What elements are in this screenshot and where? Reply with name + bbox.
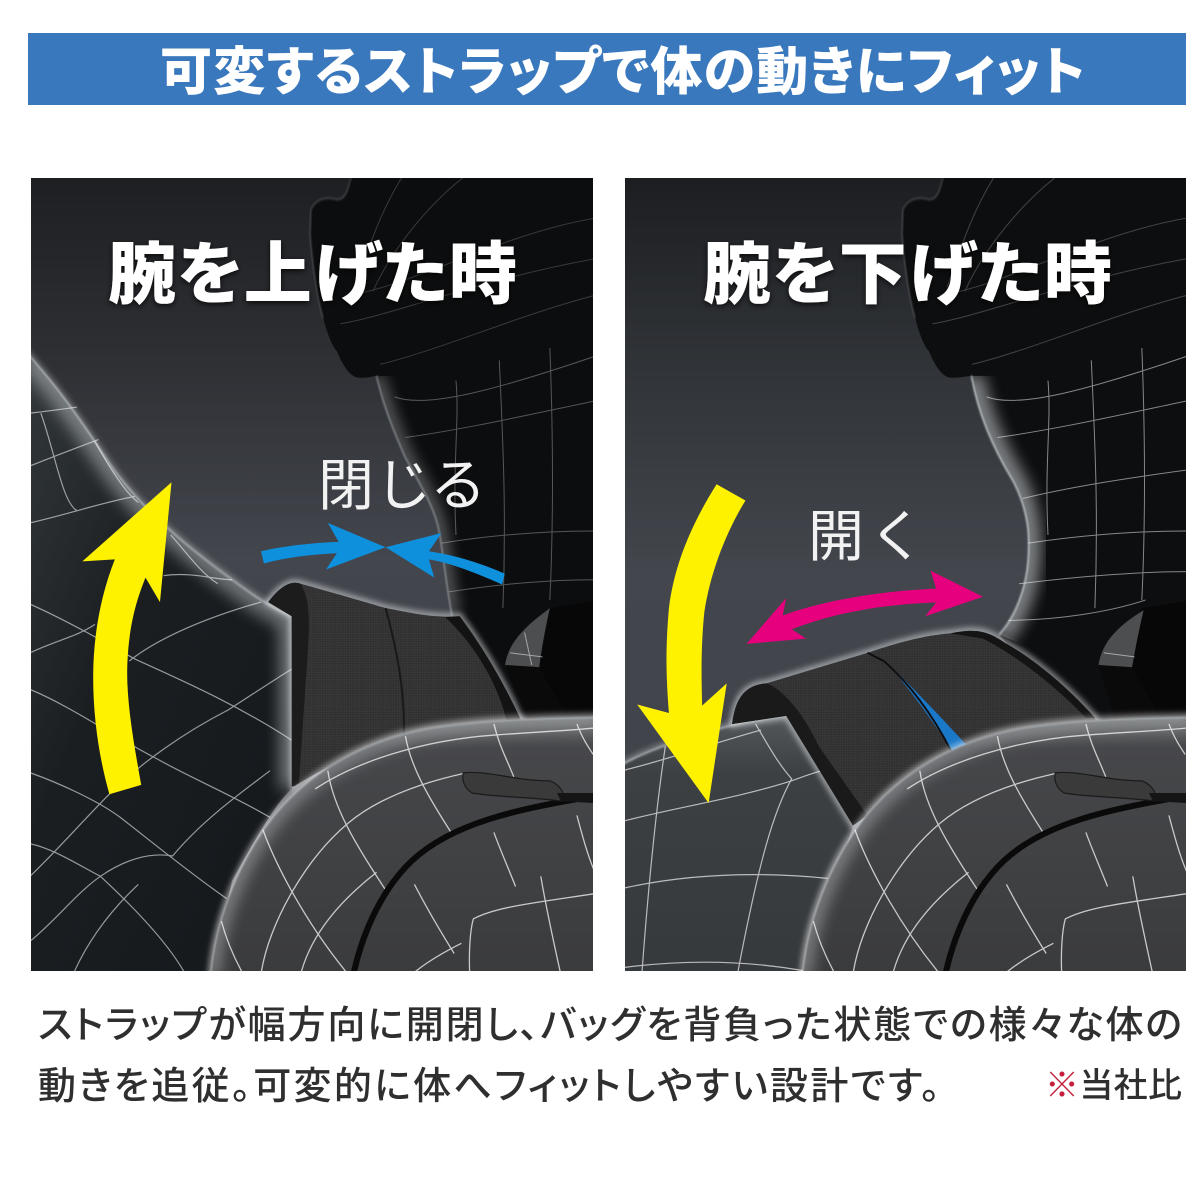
small rear strap <box>1098 610 1144 668</box>
arrow: yellow upward <box>82 482 172 794</box>
arrow: blue closing right <box>386 533 505 585</box>
panel: arm raised <box>28 173 600 978</box>
description text: 動きを追従。可変的に体へフィットしやすい設計です。 <box>38 1066 940 1108</box>
bag body <box>802 717 1192 978</box>
title text: 可変するストラップで体の動きにフィット <box>160 44 1085 102</box>
title banner <box>28 33 1186 105</box>
label: closing: 閉じる <box>318 454 483 517</box>
strap open with blue gap <box>732 631 1099 826</box>
small rear strap <box>505 608 550 668</box>
raised arm with grid <box>28 356 292 978</box>
lowered arm with grid <box>620 716 853 978</box>
arrow: yellow downward <box>637 484 745 803</box>
neck and head silhouette <box>902 173 1192 746</box>
arrow: blue closing left <box>261 523 386 570</box>
description text: ストラップが幅方向に開閉し、バッグを背負った状態での様々な体の <box>38 1005 1182 1047</box>
strap closed <box>268 583 521 787</box>
bag body <box>210 717 600 978</box>
heading: arm raised: 腕を上げた時 <box>108 237 517 313</box>
footnote: company comparison: ※当社比 <box>1045 1067 1182 1105</box>
heading: arm lowered: 腕を下げた時 <box>703 237 1112 313</box>
arrow: magenta double <box>747 571 983 644</box>
label: opening: 開く <box>808 505 915 568</box>
description text <box>38 1005 1182 1108</box>
panel: arm lowered <box>620 173 1192 978</box>
neck and head silhouette <box>310 173 600 746</box>
